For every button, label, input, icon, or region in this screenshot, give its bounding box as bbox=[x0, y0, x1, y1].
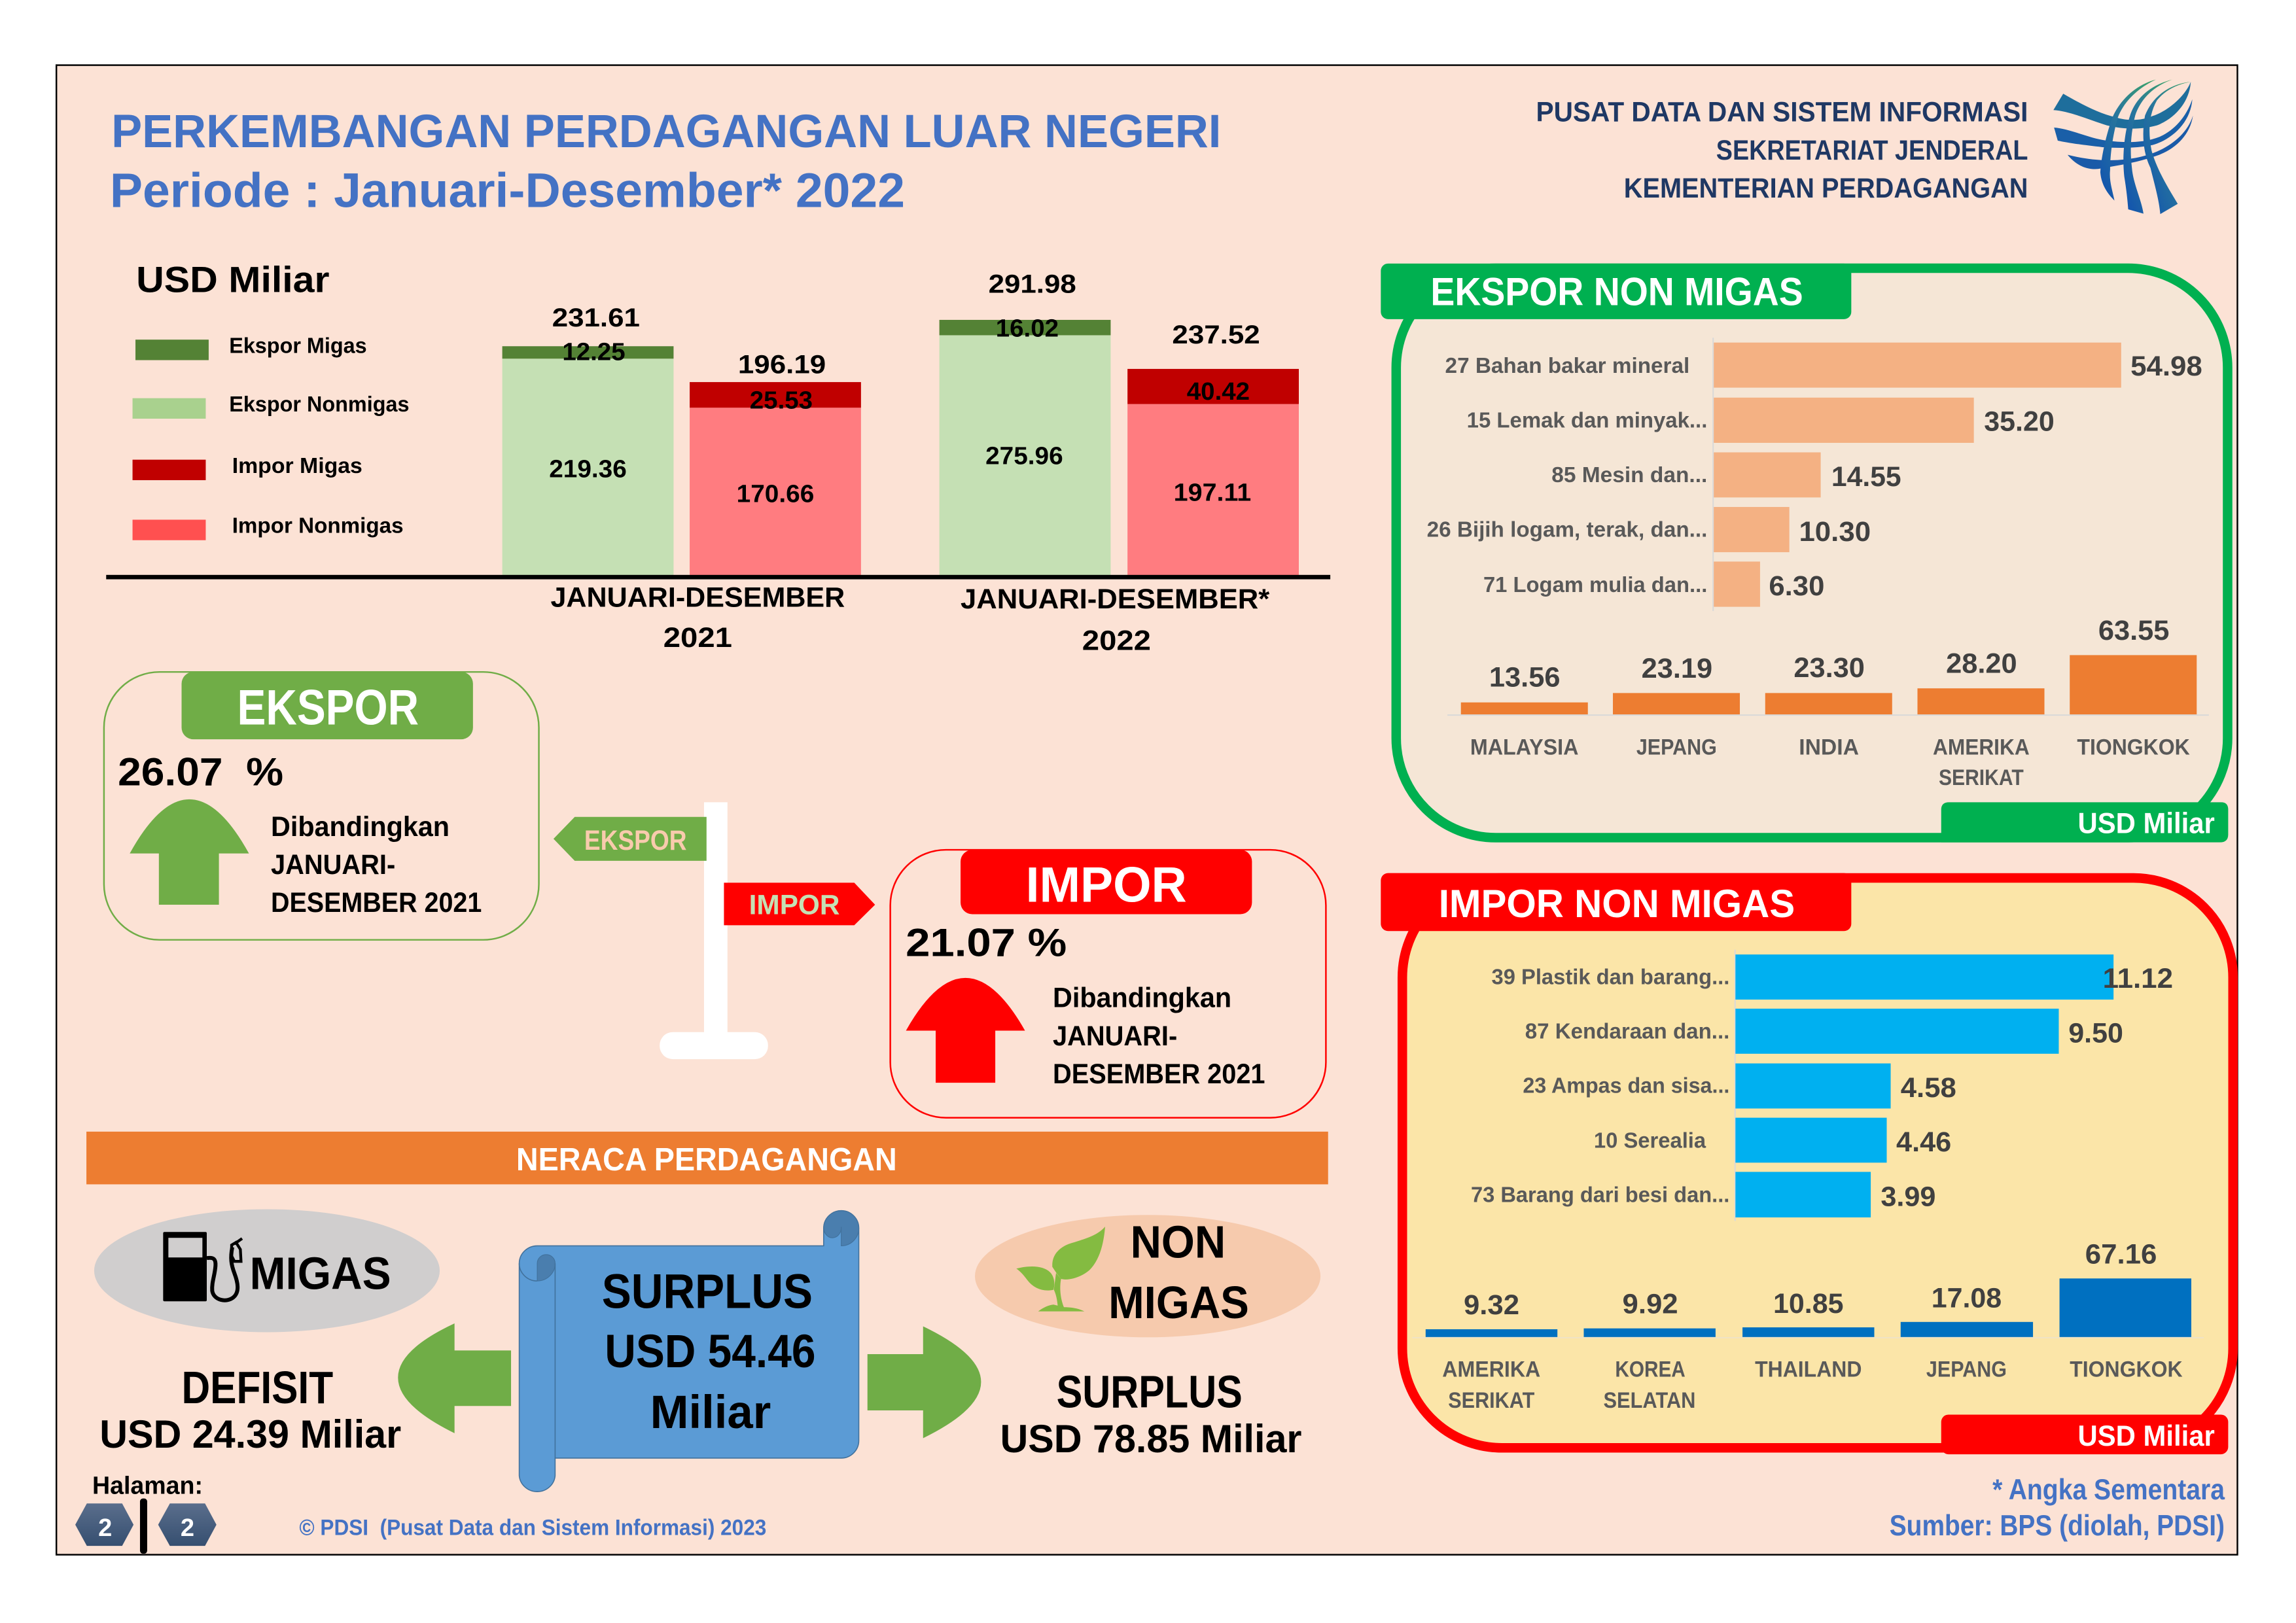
chart: top commodities: 14.55 bbox=[1831, 462, 1901, 493]
axis labels: 2021 bbox=[663, 623, 732, 654]
title bbox=[110, 105, 1221, 218]
panel: non migas: NON bbox=[1131, 1216, 1226, 1267]
panel: impor non migas bbox=[1381, 873, 2233, 1454]
arrow: ekspor up bbox=[130, 799, 249, 905]
chart: top origin countries: 10.85 bbox=[1773, 1289, 1843, 1319]
panel: impor growth: JANUARI- bbox=[1053, 1021, 1177, 1052]
panel: ekspor non migas bbox=[1381, 264, 2228, 843]
chart legend: Ekspor Nonmigas bbox=[229, 393, 410, 417]
unit tab: USD Miliar bbox=[2078, 807, 2215, 839]
chart: top commodities: 15 Lemak dan minyak... bbox=[1467, 408, 1707, 432]
panel heading bbox=[1381, 264, 1851, 319]
panel: impor growth: IMPOR bbox=[1026, 858, 1187, 913]
panel: ekspor growth bbox=[104, 672, 539, 940]
scroll: total surplus: SURPLUS bbox=[602, 1265, 813, 1319]
scroll: total surplus bbox=[520, 1211, 859, 1492]
icon: signpost bbox=[554, 802, 875, 1059]
text: non migas surplus bbox=[1000, 1367, 1301, 1461]
icon: fuel pump bbox=[163, 1232, 242, 1301]
bar: impor 2022: 237.52 bbox=[1172, 320, 1260, 349]
footnote and source bbox=[1890, 1473, 2225, 1542]
panel: impor growth: 21.07 % bbox=[906, 920, 1067, 964]
panel: ekspor growth: 26.07 % bbox=[118, 750, 283, 794]
panel: impor growth: DESEMBER 2021 bbox=[1053, 1059, 1265, 1090]
chart: top destination countries: 23.19 bbox=[1642, 654, 1712, 684]
chart legend: Impor Migas bbox=[232, 454, 362, 478]
chart: top commodities: 10 Serealia bbox=[1594, 1128, 1706, 1153]
chart: top destination countries: 23.30 bbox=[1793, 653, 1865, 684]
chart: top destination countries: TIONGKOK bbox=[2077, 735, 2190, 760]
chart: top commodities: 35.20 bbox=[1984, 407, 2055, 438]
chart: top commodities: 73 Barang dari besi dan... bbox=[1471, 1183, 1729, 1208]
bar: ekspor 2022 bbox=[940, 270, 1110, 575]
panel: impor growth: Dibandingkan bbox=[1053, 983, 1231, 1014]
bar: impor 2021: 170.66 bbox=[737, 481, 814, 508]
axis labels bbox=[550, 583, 1270, 657]
panel: migas bbox=[94, 1209, 440, 1332]
chart legend: Impor Nonmigas bbox=[232, 514, 404, 538]
unit tab: USD Miliar bbox=[2078, 1420, 2215, 1452]
text: migas deficit: USD 24.39 Miliar bbox=[99, 1412, 401, 1456]
bar: impor 2021 bbox=[690, 350, 861, 575]
stacked bar chart bbox=[106, 270, 1330, 657]
bar: impor 2021: 25.53 bbox=[750, 387, 813, 414]
panel: impor growth bbox=[891, 850, 1326, 1118]
footnote and source: * Angka Sementara bbox=[1992, 1473, 2225, 1506]
organisation name: SEKRETARIAT JENDERAL bbox=[1716, 135, 2028, 166]
chart: top commodities: 71 Logam mulia dan... bbox=[1483, 573, 1707, 597]
organisation name bbox=[1536, 97, 2028, 204]
chart: top origin countries: 9.92 bbox=[1623, 1289, 1678, 1319]
chart: top origin countries: THAILAND bbox=[1755, 1357, 1862, 1382]
arrow: impor flag bbox=[724, 882, 875, 925]
footnote and source: Sumber: BPS (diolah, PDSI) bbox=[1890, 1509, 2225, 1542]
chart: top destination countries: 13.56 bbox=[1489, 663, 1560, 693]
bar: impor 2022: 40.42 bbox=[1187, 378, 1250, 406]
chart: top commodities: 6.30 bbox=[1769, 571, 1824, 602]
chart: top destination countries bbox=[1447, 616, 2209, 790]
copyright: © PDSI (Pusat Data dan Sistem Informasi) 2023 bbox=[299, 1515, 766, 1540]
panel heading: EKSPOR NON MIGAS bbox=[1430, 270, 1803, 314]
axis labels: 2022 bbox=[1082, 626, 1151, 657]
arrow: ekspor flag: EKSPOR bbox=[584, 826, 687, 856]
arrow: to non migas bbox=[868, 1326, 981, 1438]
chart: top origin countries: TIONGKOK bbox=[2070, 1357, 2183, 1382]
panel: ekspor growth: JANUARI- bbox=[271, 850, 395, 881]
chart: top commodities bbox=[1471, 950, 2173, 1221]
bar: ekspor 2022: 16.02 bbox=[996, 315, 1059, 343]
chart: top origin countries: 67.16 bbox=[2085, 1240, 2157, 1270]
chart: top origin countries: SERIKAT bbox=[1448, 1388, 1534, 1413]
panel heading: IMPOR NON MIGAS bbox=[1439, 881, 1795, 926]
title: Periode : Januari-Desember* 2022 bbox=[110, 164, 905, 218]
panel heading bbox=[1381, 873, 1851, 931]
panel: migas: MIGAS bbox=[250, 1248, 391, 1299]
chart: top destination countries: 28.20 bbox=[1946, 648, 2017, 679]
bar: ekspor 2021: 231.61 bbox=[552, 303, 640, 332]
icon: plant bbox=[1016, 1227, 1105, 1312]
chart: top commodities: 3.99 bbox=[1881, 1182, 1935, 1213]
chart: top origin countries: 9.32 bbox=[1464, 1290, 1519, 1321]
chart: top commodities: 10.30 bbox=[1799, 517, 1871, 548]
chart: top destination countries: SERIKAT bbox=[1939, 765, 2024, 790]
chart: top commodities: 4.46 bbox=[1896, 1127, 1951, 1158]
page number: Halaman: bbox=[92, 1472, 203, 1499]
heading: neraca perdagangan: NERACA PERDAGANGAN bbox=[516, 1142, 897, 1178]
arrow: impor flag: IMPOR bbox=[749, 890, 839, 921]
page number: 2 bbox=[181, 1514, 194, 1542]
bar: ekspor 2021: 219.36 bbox=[549, 456, 627, 483]
chart: top commodities: 4.58 bbox=[1901, 1073, 1956, 1104]
text: migas deficit: DEFISIT bbox=[182, 1362, 333, 1413]
panel: ekspor growth: DESEMBER 2021 bbox=[271, 888, 482, 918]
chart: top origin countries: JEPANG bbox=[1926, 1357, 2007, 1382]
chart: top commodities: 85 Mesin dan... bbox=[1551, 463, 1707, 487]
chart: top origin countries: KOREA bbox=[1615, 1357, 1686, 1382]
panel: non migas: MIGAS bbox=[1108, 1277, 1249, 1328]
chart: top commodities bbox=[1427, 338, 2202, 611]
chart: top origin countries: 17.08 bbox=[1932, 1283, 2002, 1314]
chart legend bbox=[133, 334, 410, 540]
scroll: total surplus: USD 54.46 bbox=[605, 1325, 816, 1378]
bar: impor 2022: 197.11 bbox=[1174, 479, 1251, 506]
bar: impor 2021: 196.19 bbox=[738, 350, 826, 379]
chart: top destination countries: 63.55 bbox=[2098, 616, 2169, 646]
chart: top commodities: 39 Plastik dan barang... bbox=[1492, 966, 1729, 990]
title: PERKEMBANGAN PERDAGANGAN LUAR NEGERI bbox=[111, 105, 1221, 158]
text: non migas surplus: SURPLUS bbox=[1057, 1367, 1243, 1418]
bar: ekspor 2022: 291.98 bbox=[989, 270, 1076, 299]
panel: ekspor growth: EKSPOR bbox=[238, 680, 419, 736]
chart: top destination countries: INDIA bbox=[1799, 735, 1859, 760]
axis labels: JANUARI-DESEMBER* bbox=[961, 584, 1270, 615]
chart: top commodities: 26 Bijih logam, terak, dan... bbox=[1427, 518, 1707, 542]
bar: ekspor 2021 bbox=[503, 303, 673, 575]
axis labels: JANUARI-DESEMBER bbox=[550, 583, 845, 614]
chart: top destination countries: AMERIKA bbox=[1933, 735, 2030, 760]
bar: impor 2022 bbox=[1127, 320, 1299, 575]
text: migas deficit bbox=[99, 1362, 401, 1456]
chart: top origin countries bbox=[1412, 1240, 2204, 1413]
arrow: ekspor flag bbox=[554, 817, 707, 861]
bar: ekspor 2022: 275.96 bbox=[985, 442, 1063, 470]
chart legend: Ekspor Migas bbox=[229, 334, 367, 358]
icon: ministry logo bbox=[2050, 79, 2197, 216]
chart: top origin countries: SELATAN bbox=[1603, 1388, 1695, 1413]
heading: USD Miliar: USD Miliar bbox=[136, 259, 330, 300]
chart: top destination countries: JEPANG bbox=[1636, 735, 1717, 760]
chart: top commodities: 87 Kendaraan dan... bbox=[1525, 1019, 1729, 1043]
unit tab bbox=[1941, 1414, 2228, 1454]
chart: top origin countries: AMERIKA bbox=[1442, 1357, 1540, 1382]
panel: non migas bbox=[975, 1215, 1320, 1337]
chart: top commodities: 11.12 bbox=[2103, 964, 2173, 994]
organisation name: PUSAT DATA DAN SISTEM INFORMASI bbox=[1536, 97, 2028, 128]
chart: top commodities: 9.50 bbox=[2068, 1018, 2123, 1049]
arrow: to migas bbox=[398, 1323, 511, 1433]
page number bbox=[75, 1472, 217, 1554]
scroll: total surplus: Miliar bbox=[650, 1386, 771, 1439]
page number: 2 bbox=[98, 1514, 112, 1542]
heading: neraca perdagangan bbox=[86, 1132, 1328, 1184]
bar: ekspor 2021: 12.25 bbox=[562, 339, 626, 366]
arrow: impor up bbox=[906, 978, 1025, 1083]
chart: top commodities: 54.98 bbox=[2130, 351, 2202, 382]
text: non migas surplus: USD 78.85 Miliar bbox=[1000, 1416, 1301, 1461]
chart: top commodities: 23 Ampas dan sisa... bbox=[1523, 1074, 1729, 1098]
panel: ekspor growth: Dibandingkan bbox=[271, 812, 450, 843]
chart: top destination countries: MALAYSIA bbox=[1470, 735, 1578, 760]
chart: top commodities: 27 Bahan bakar mineral bbox=[1445, 354, 1689, 378]
organisation name: KEMENTERIAN PERDAGANGAN bbox=[1624, 173, 2028, 204]
unit tab bbox=[1941, 802, 2228, 843]
